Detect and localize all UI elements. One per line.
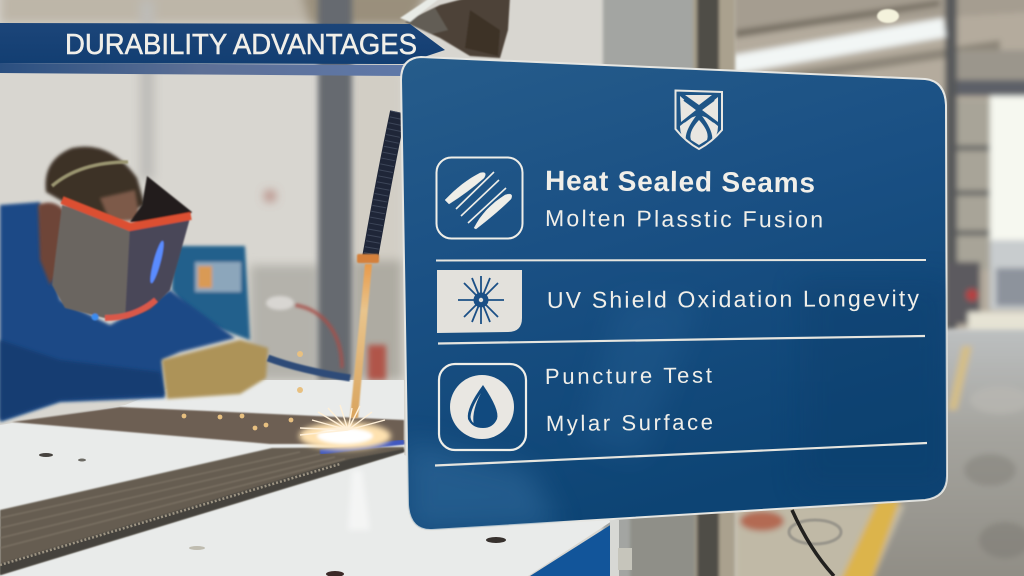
- head: [46, 147, 145, 225]
- heading: heat sealed seams: Heat Sealed Seams: [545, 165, 815, 198]
- jacket: [0, 202, 235, 422]
- welding hose and molten stream: [350, 112, 398, 418]
- text: mylar surface: Mylar Surface: [546, 410, 713, 436]
- face shield: [52, 176, 192, 320]
- icon: shield emblem: [676, 90, 722, 149]
- icon: UV shield: [437, 270, 522, 333]
- banner title: DURABILITY ADVANTAGES: [65, 29, 417, 61]
- text: molten plastic fusion: Molten Plasstic Fusion: [545, 205, 823, 232]
- banner: durability advantages: [0, 23, 445, 76]
- text: UV shield oxidation longevity: UV Shield Oxidation Longevity: [547, 285, 920, 313]
- glove: [162, 340, 268, 399]
- panel: durability sign: [401, 57, 950, 535]
- central steel column: [603, 0, 735, 576]
- metal sheet on table: [12, 407, 404, 444]
- welding table: [0, 380, 632, 576]
- text: puncture test: Puncture Test: [545, 363, 712, 389]
- worker: [0, 147, 350, 422]
- mounting clamp: [400, 0, 510, 58]
- black cable under sign: [792, 510, 834, 576]
- sparks: [182, 351, 391, 450]
- torch handle: [268, 358, 350, 378]
- woven seam strip: [0, 442, 404, 575]
- icon: heat sealed seams: [436, 158, 522, 238]
- icon: puncture test drop: [439, 364, 526, 450]
- blue welding machine: [172, 246, 342, 368]
